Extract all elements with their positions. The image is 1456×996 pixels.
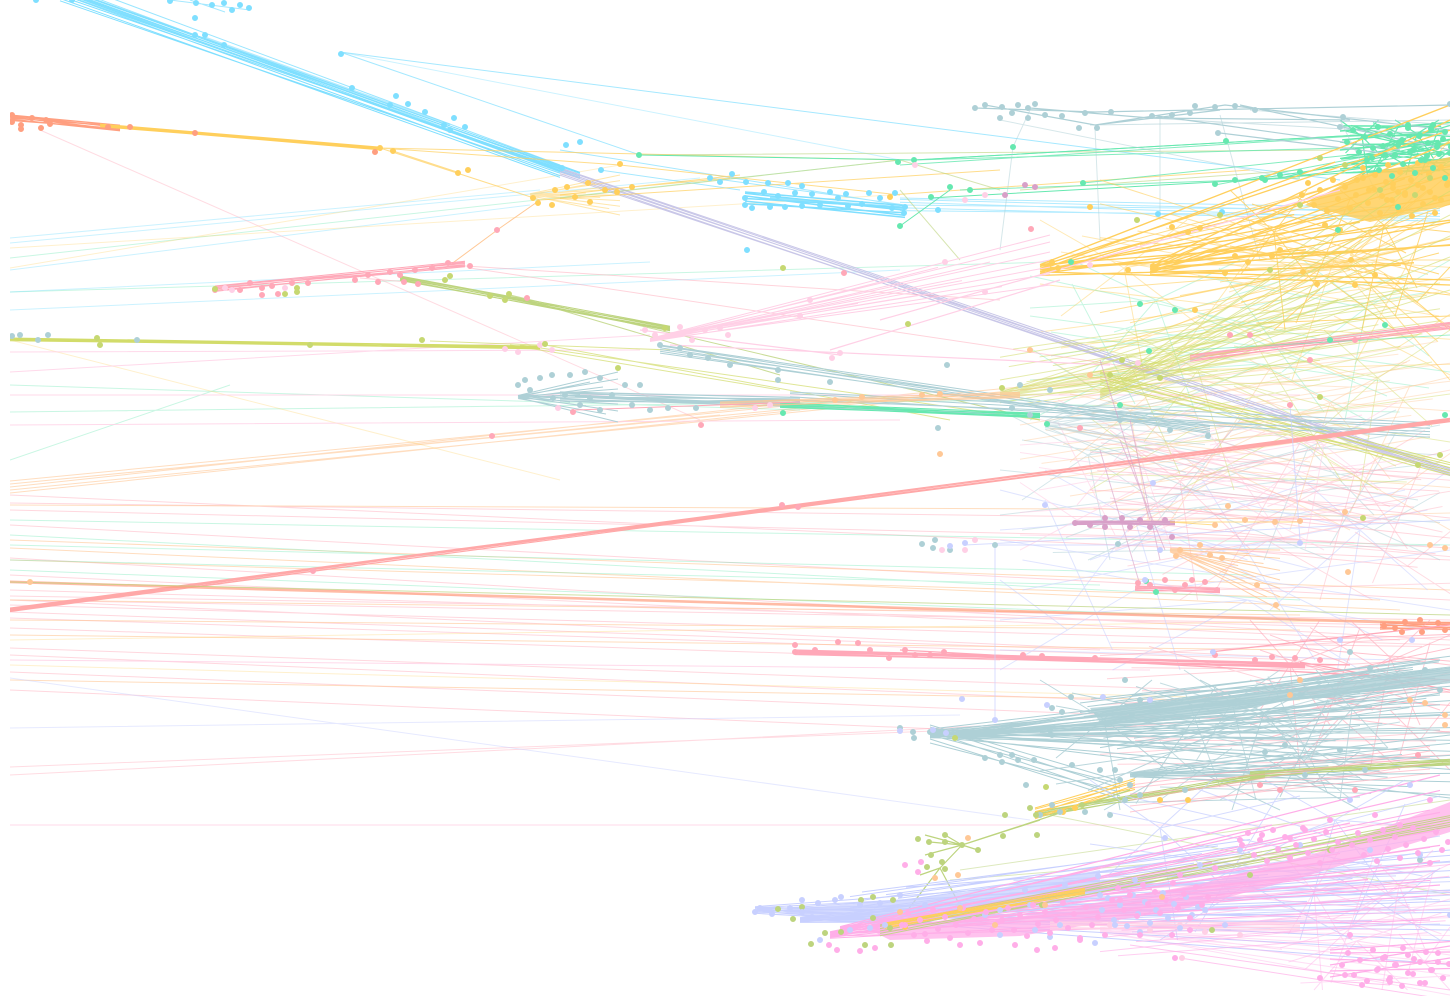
mauve cluster edges xyxy=(965,360,1450,720)
dots: salmon pink xyxy=(215,229,1418,790)
pink horizontal bundle xyxy=(795,625,1450,690)
teal mid cluster xyxy=(518,345,1430,495)
dense yellow hub xyxy=(1000,105,1450,405)
dots: yellow xyxy=(380,148,1456,927)
dots: mauve xyxy=(1005,185,1172,537)
dots: olive lower xyxy=(778,805,1330,945)
pale network mesh, right side xyxy=(1000,220,1456,770)
salmon thick edge xyxy=(10,418,1450,612)
dots: light pink xyxy=(225,165,1240,958)
magenta pink bundle xyxy=(830,745,1456,996)
dots: lime xyxy=(97,158,1440,787)
dots: teal xyxy=(12,104,1450,860)
coral horizontal band xyxy=(10,581,1456,770)
coral to yellow bundle xyxy=(10,115,1450,265)
dots: orange xyxy=(30,350,1445,925)
mint bundle xyxy=(640,120,1450,226)
top teal cluster edges xyxy=(975,105,1450,260)
teal dense cluster xyxy=(930,656,1450,810)
dots: mint xyxy=(639,123,1456,592)
dots: sky xyxy=(36,0,1222,250)
sky blue bundle xyxy=(60,0,1450,476)
faint long edges from the left xyxy=(10,52,1450,825)
mid pink and olive bundles xyxy=(10,190,1450,475)
periwinkle bundle xyxy=(755,780,1455,965)
dots: coral xyxy=(12,115,1445,632)
dots: periwinkle xyxy=(755,483,1450,943)
dots: magenta pink xyxy=(829,800,1456,988)
olive and yellow lower bundle xyxy=(900,759,1450,920)
